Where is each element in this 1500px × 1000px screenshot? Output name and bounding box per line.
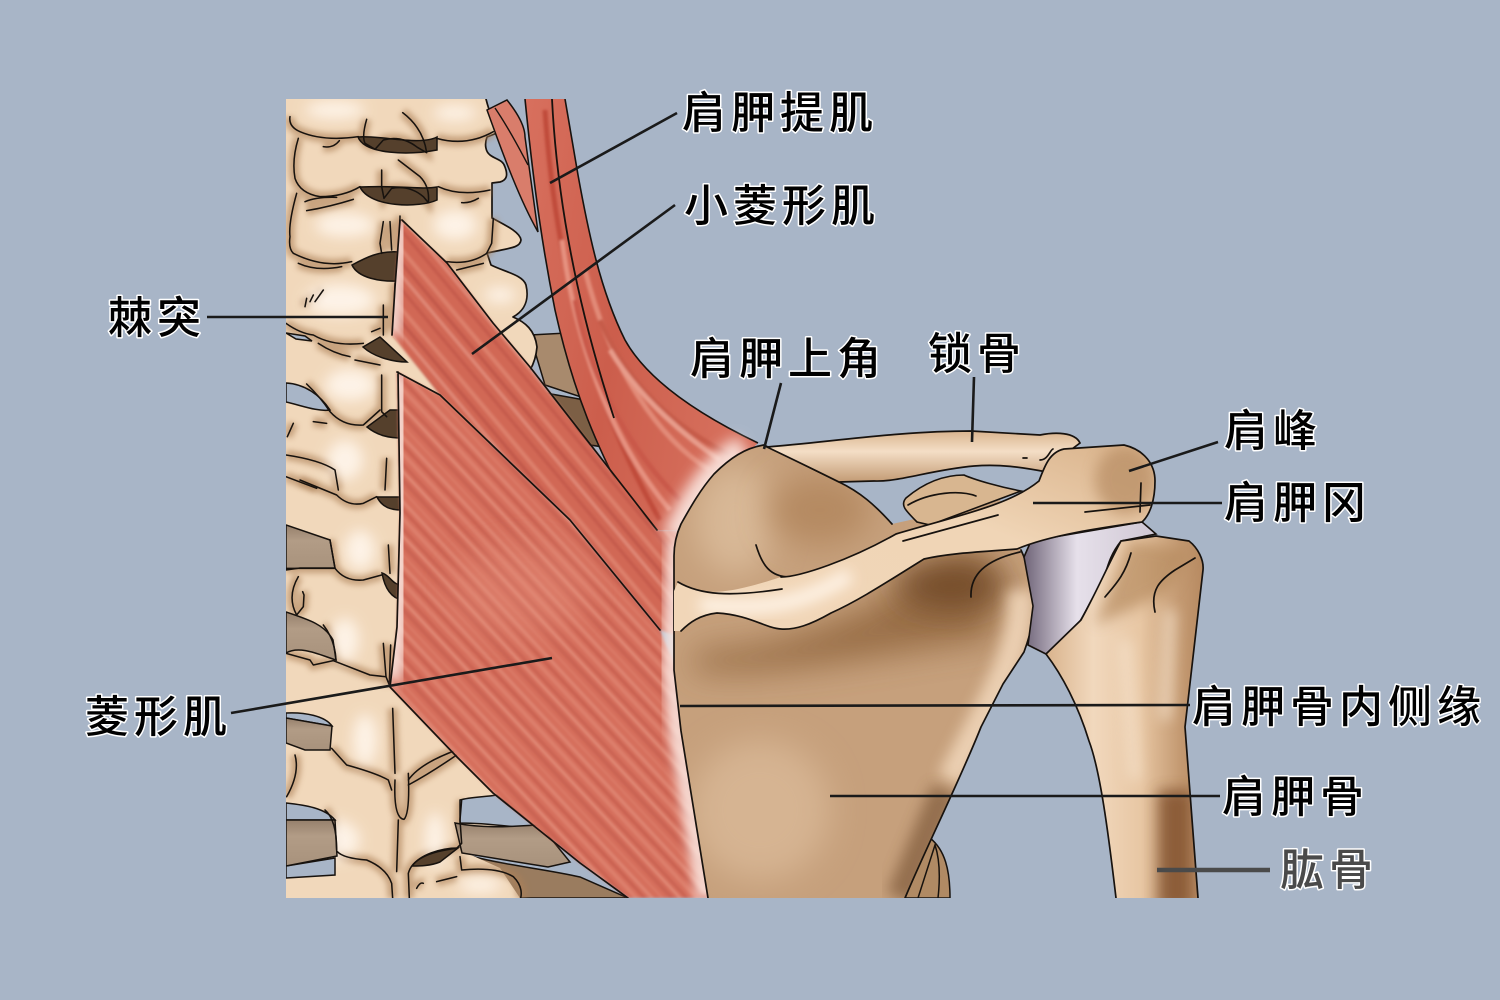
humerus xyxy=(1046,536,1203,910)
label: levator scapulae xyxy=(550,89,878,183)
vertebral column xyxy=(286,99,570,898)
rhomboid major muscle xyxy=(390,372,720,898)
label: rhomboid major: 菱形肌 xyxy=(85,693,232,742)
cartilage of the glenoid xyxy=(1024,522,1156,654)
scapula xyxy=(674,445,1034,898)
right lower rib xyxy=(455,823,570,867)
anatomical illustration xyxy=(286,99,1203,910)
label: levator scapulae: 肩胛提肌 xyxy=(682,89,878,138)
clavicle xyxy=(767,431,1080,482)
ribs behind the spine xyxy=(472,332,626,898)
label: rhomboid minor: 小菱形肌 xyxy=(684,182,880,231)
vertebral foramina xyxy=(352,137,458,866)
label: scapula: 肩胛骨 xyxy=(1222,773,1369,822)
scapular spine and acromion xyxy=(674,445,1155,631)
blue gaps on the left of the spine xyxy=(286,333,540,878)
levator scapulae muscle xyxy=(525,99,758,530)
label: medial border of scapula: 肩胛骨内侧缘 xyxy=(1192,683,1486,732)
label: rhomboid minor xyxy=(472,182,880,354)
label: acromion xyxy=(1129,407,1322,471)
label: acromion: 肩峰 xyxy=(1224,407,1322,456)
label: rhomboid major xyxy=(85,658,552,742)
label: superior angle of scapula xyxy=(690,335,886,449)
label: humerus: 肱骨 xyxy=(1280,846,1378,895)
label: spine of scapula: 肩胛冈 xyxy=(1224,479,1371,528)
label: clavicle: 锁骨 xyxy=(928,330,1026,379)
spine line work xyxy=(286,113,521,898)
pale muscle insertion along scapula xyxy=(672,450,745,898)
label: superior angle of scapula: 肩胛上角 xyxy=(690,335,886,384)
ribs on the left xyxy=(286,525,337,866)
rhomboid minor muscle xyxy=(392,220,690,640)
label: clavicle xyxy=(928,330,1026,442)
lower rib beside scapula xyxy=(905,838,950,898)
levator scapulae outer strand xyxy=(487,100,538,232)
coracoid process xyxy=(903,475,1021,525)
label: spinous process: 棘突 xyxy=(108,294,206,343)
bone shading xyxy=(286,113,493,490)
